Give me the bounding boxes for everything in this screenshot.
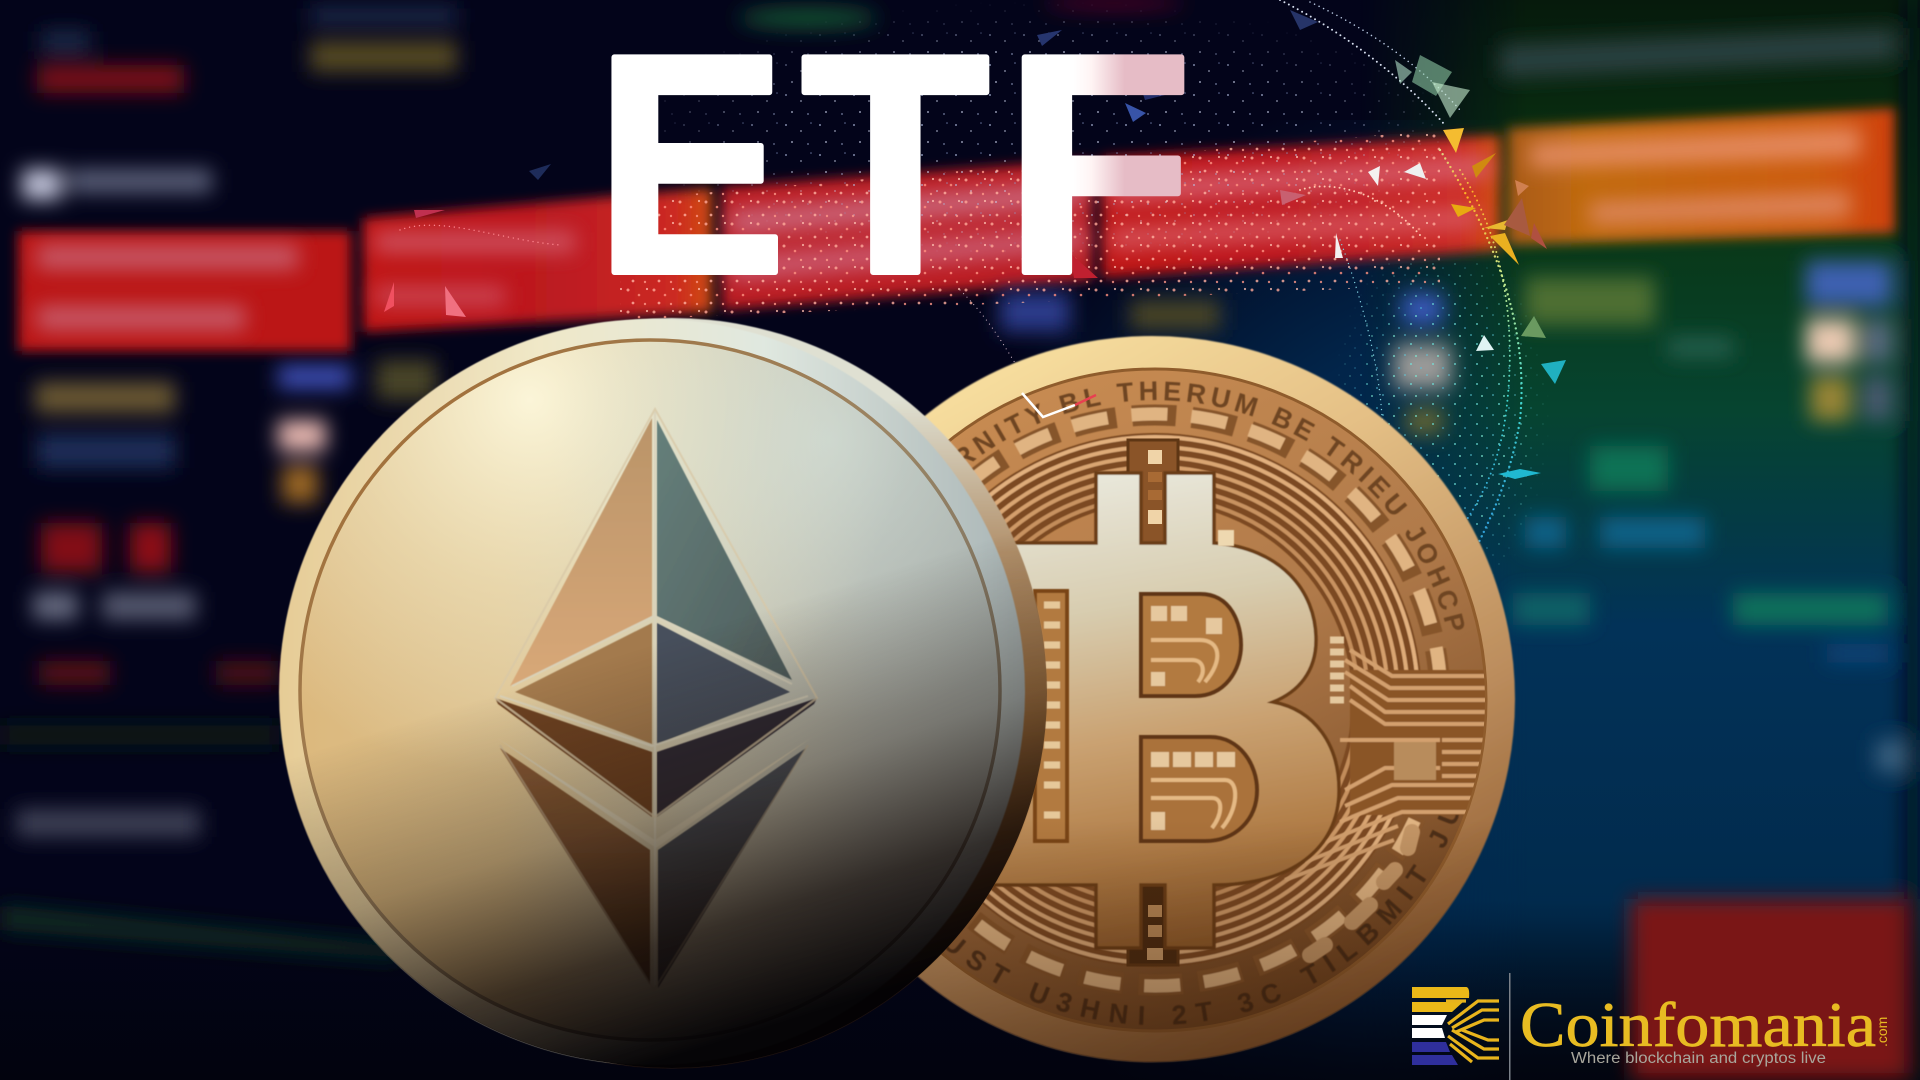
panel: right blurred tiles [738,0,1920,1080]
coin: bitcoin [917,335,1516,1063]
circuit traces [1285,640,1490,955]
coin: ethereum [270,310,1060,1070]
bottom shade [290,552,1047,1068]
wordmark: Coinfomania [1520,989,1876,1060]
bitcoin symbol counters [1035,530,1257,841]
title: ETF: F [1004,0,1193,338]
bitcoin symbol [990,473,1339,948]
bitcoin symbol slots [1128,440,1178,965]
face [824,369,1486,1031]
ring lettering: ETERNITY BL THERUM BE TRIEU JOHCP [957,380,1464,630]
panel: red headline bars [18,108,1896,351]
engraved ring [300,340,1000,1040]
rim [789,336,1515,1062]
coin face [279,319,1025,1065]
logo mark [1412,987,1499,1065]
ring lettering [946,380,1464,1025]
panel: left blurred tiles [0,7,457,960]
title: ETF: E [595,0,786,339]
panel: pale bar stripes [37,128,1860,330]
icon: glitch tick [1022,393,1075,417]
coin edge [297,318,1047,1068]
concentric tracks [982,432,1420,964]
tagline: Where blockchain and cryptos live [1571,1050,1826,1067]
dashed bead ring [869,414,1441,986]
title: ETF: T [801,0,990,338]
logo: Coinfomania [1412,973,1890,1080]
icon: crystal shards [384,10,1566,479]
title: ETF [595,0,1193,339]
icon: ethereum diamond [495,409,817,990]
particle globe [384,0,1566,610]
ring lettering: CHEL JUST U3HNI 2T 3C TILBMIT JUCKO [946,814,1460,1025]
wordmark suffix: .com [1874,1017,1890,1047]
